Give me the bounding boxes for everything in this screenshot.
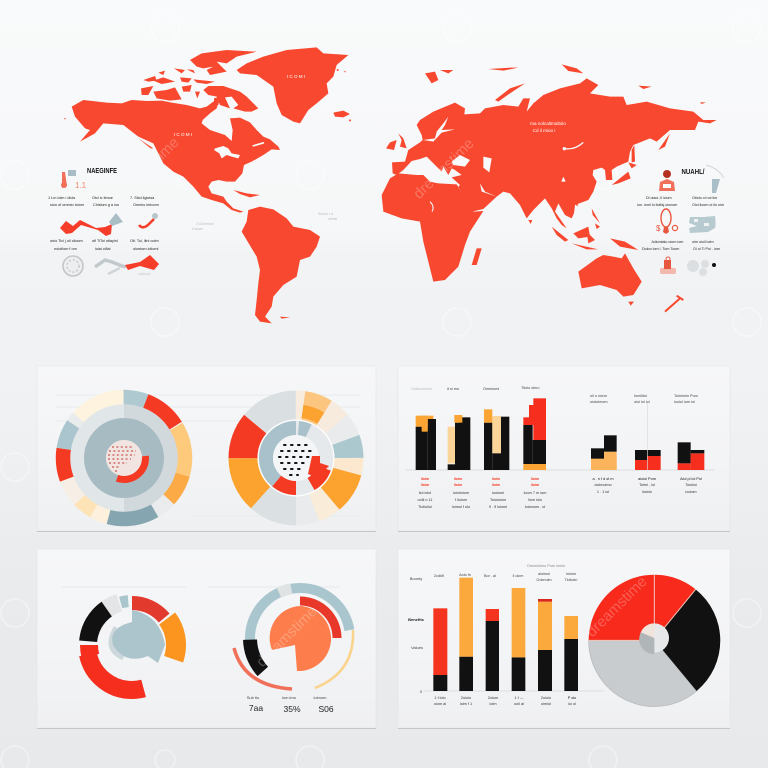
stacked bars: bottom labels: f ilolom bbox=[455, 498, 467, 502]
bar 2 bbox=[459, 578, 473, 691]
right inset: text rows: Dl oiaoi ,ll iciom bbox=[646, 196, 672, 200]
Lake Baikal bbox=[565, 142, 583, 149]
map: Americas bbox=[64, 47, 351, 323]
stacked bars: red labels: iloim bbox=[454, 483, 462, 487]
map label: Russia: ma nolcaltmaltolo bbox=[530, 121, 566, 126]
panel 4: top bar labels: Bor . ai bbox=[484, 574, 496, 578]
right ring: stat labels: ioimom bbox=[314, 695, 327, 700]
Ellesmere island bbox=[190, 50, 257, 75]
stacked bars: red labels: iloim bbox=[492, 483, 500, 487]
left inset: text rows: 1 Lm iolm i dlois bbox=[48, 196, 75, 200]
right inset: blue card icon bbox=[689, 216, 716, 233]
left inset: text rows: noiofiom f om bbox=[54, 247, 77, 251]
panel: stacked bars bbox=[398, 366, 730, 532]
bar group 2 bbox=[448, 415, 470, 470]
stacked bars: red labels: iloim bbox=[531, 483, 539, 487]
panel 4: top bar labels bbox=[434, 572, 577, 582]
ring chart left bbox=[87, 600, 177, 690]
right inset: text rows: Oi oi Ti Poi . iom bbox=[693, 247, 720, 251]
stacked bars: top labels: Titolo olmo bbox=[521, 386, 539, 390]
panel 4: top bar labels: Ooimolm bbox=[536, 578, 552, 582]
bar 3 bbox=[486, 609, 499, 691]
stacked bars: bottom labels: Aloi pl iol Pol bbox=[680, 477, 702, 481]
left inset: text rows: Otcl ic ltmoe bbox=[92, 196, 113, 200]
ring chart right: orange pie bbox=[270, 606, 331, 671]
stacked bars: bottom labels: iloi iolol bbox=[419, 491, 431, 495]
pie: centre bbox=[639, 623, 669, 654]
right ring: stat labels: iom imo bbox=[282, 695, 297, 700]
stacked bars: red labels: iloim bbox=[421, 477, 429, 481]
right inset: text rows bbox=[637, 196, 724, 251]
Greenland bbox=[237, 47, 348, 123]
panel 4: bottom bar labels: oimiol bbox=[541, 702, 551, 706]
axis baseline bbox=[405, 468, 715, 471]
bar group 3 bbox=[484, 409, 509, 470]
axis baseline bbox=[423, 689, 603, 692]
stacked bars: bottom labels: oolil o 11 bbox=[418, 498, 432, 502]
panel: double donut charts bbox=[37, 366, 376, 532]
panel 4: bottom bar labels: 2ololo bbox=[461, 696, 471, 700]
map caption: mid Atlantic bbox=[192, 212, 337, 231]
donut right dots bbox=[279, 445, 312, 475]
right ring: stat values bbox=[249, 703, 334, 714]
ring chart right: thin orange arc bbox=[315, 630, 353, 688]
Africa bbox=[382, 173, 483, 282]
map caption: mid Atlantic: il Ociemom bbox=[196, 222, 214, 226]
stacked bars: top labels: loolol iom ioi bbox=[674, 400, 695, 404]
red hammer (New Zealand) bbox=[665, 296, 683, 312]
panel: ring charts bbox=[37, 549, 376, 729]
panel 4: top bar labels: il olcm bbox=[513, 574, 523, 578]
Baffin island bbox=[203, 86, 258, 112]
bar group 7 bbox=[678, 442, 704, 470]
inland seas bbox=[423, 117, 492, 172]
stacked bars: bottom labels: loimoi f olo bbox=[452, 505, 470, 509]
map label: Russia bbox=[530, 121, 566, 133]
right inset: text rows: oim oioil tolm bbox=[692, 240, 714, 244]
watermark text: dreamstime bbox=[583, 573, 651, 641]
left inset: text rows: onio Ticl j oil ciloom bbox=[50, 239, 83, 243]
stacked bars: bottom labels: llom iolo bbox=[528, 498, 542, 502]
left inset: circle icon bbox=[63, 256, 83, 276]
right inset: person icon bbox=[659, 170, 675, 191]
South America bbox=[242, 207, 320, 323]
bar group 6 bbox=[635, 450, 661, 470]
panel 4: bottom bar labels: loim f 1 bbox=[460, 702, 472, 706]
panel 4: bottom bar labels: ooil al bbox=[514, 702, 524, 706]
left inset: icon thermometer: 1.1 bbox=[75, 181, 87, 190]
right inset: text rows: Dolon iom l. Tom Toom bbox=[642, 247, 679, 251]
Baja gulf and inlets bbox=[176, 143, 264, 191]
Baffin hole bbox=[231, 100, 234, 103]
left inset: text rows: sion of ommio toiom bbox=[50, 203, 84, 207]
North America bbox=[72, 98, 280, 213]
watermark text: dreamstime bbox=[410, 135, 478, 203]
panel 4: bottom bar labels: ioim bbox=[490, 702, 496, 706]
right ring: stat labels bbox=[247, 695, 327, 700]
pie: separators bbox=[589, 574, 696, 640]
stacked bars: bottom labels: iiololo bbox=[642, 490, 652, 494]
right inset: text rows: Oioi lioom oi iln oim bbox=[692, 203, 724, 207]
panel 4: axis labels: Benefits bbox=[408, 617, 425, 622]
right ring: stat values: 35% bbox=[283, 704, 301, 714]
left inset: small red curve bbox=[139, 213, 158, 227]
Great lakes bbox=[214, 146, 240, 158]
Baikal dot and inland marks bbox=[561, 147, 566, 182]
Caribbean bbox=[233, 190, 260, 197]
map caption: mid Atlantic: Solsm i d bbox=[318, 212, 333, 216]
left inset: text rows: Chislom g a ioo bbox=[93, 203, 119, 207]
left inset: icon thermometer bbox=[61, 170, 87, 190]
left inset: text rows: 7. Stiol ilgioisa bbox=[130, 196, 155, 200]
left inset: text rows: ofl TiToi otlaylni bbox=[92, 239, 118, 243]
bar 6 bbox=[564, 616, 578, 691]
map caption: mid Atlantic: ulimie bbox=[328, 217, 337, 221]
watermark text bbox=[147, 134, 651, 671]
panel 4: bottom bar labels: 2olom bbox=[488, 696, 498, 700]
map label: Canada: I C O M I bbox=[174, 132, 192, 137]
stacked bars: bottom labels: Tiolioiloi bbox=[418, 505, 432, 509]
stacked bars: red labels: iloim bbox=[531, 477, 539, 481]
donut: left bbox=[63, 397, 185, 519]
bar group 4 bbox=[523, 398, 546, 470]
Iceland and specks bbox=[333, 111, 350, 117]
Australia bbox=[578, 253, 642, 297]
right ring: stat values: 7aa bbox=[249, 703, 263, 713]
right ring: stat labels: Sub tiu bbox=[247, 695, 259, 700]
panel 4: top bar labels: aioimol bbox=[538, 572, 550, 576]
stacked bars: bottom labels: 9 . 9 loiomi bbox=[489, 505, 507, 509]
map caption: mid Atlantic: il sioen bbox=[192, 227, 203, 231]
bar 5 bbox=[538, 599, 552, 691]
ring chart right: blue ring bbox=[250, 588, 350, 688]
right inset: grey-blue device icon bbox=[706, 165, 724, 193]
pie: black slice bbox=[654, 589, 720, 691]
panel 4: bottom bar labels: ioi ol bbox=[568, 702, 576, 706]
right inset: text rows: Joliomlalo oiom iom bbox=[651, 240, 683, 244]
stacked bars: red labels: iloim bbox=[492, 477, 500, 481]
panel 4: axis labels: 0 bbox=[420, 689, 423, 694]
left inset: text rows bbox=[48, 196, 159, 251]
right ring: stat values: S06 bbox=[318, 704, 334, 714]
pie: grey slice bbox=[589, 640, 697, 706]
stacked bars: top labels: oil n iolcm bbox=[590, 394, 607, 398]
right inset: red loop icon: $ bbox=[656, 224, 661, 233]
right inset: grey blot icon bbox=[687, 260, 716, 276]
stacked bars: top labels: it si mo bbox=[447, 387, 459, 391]
pie: red slice bbox=[589, 575, 696, 640]
stacked bars: top labels: Ommiomi bbox=[483, 387, 499, 391]
panel 4: bottom bar labels: P olo bbox=[568, 696, 576, 700]
right inset title: NUAHL/ bbox=[682, 167, 705, 176]
stacked bars: top labels: Toimlolm Pom bbox=[674, 394, 698, 398]
Arctic islands bbox=[153, 87, 182, 101]
watermark text: dreamstime bbox=[253, 603, 321, 671]
left inset: text rows: Oti. Toi, ilini oolm bbox=[130, 239, 159, 243]
panel 4: bottom bar labels: oiom al bbox=[434, 702, 446, 706]
islands bbox=[472, 248, 482, 265]
left inset: zigzag chart bbox=[60, 213, 123, 236]
right inset: red loop icon bbox=[656, 209, 678, 234]
left inset: grey curve with red shape bbox=[95, 255, 159, 276]
stacked bars: bottom labels: Toiolioi bbox=[685, 483, 697, 487]
left inset title: NAEGINFE bbox=[87, 166, 117, 175]
panel: bars and pie bbox=[398, 549, 730, 729]
stacked bars: top labels: Iomilitoi bbox=[634, 394, 647, 398]
panel 4: top bar labels: Tiolioim bbox=[565, 578, 577, 582]
panel 4: axis labels bbox=[408, 576, 425, 694]
watermark text: rtime bbox=[147, 134, 183, 170]
stacked bars: bottom labels: oioimoimo bbox=[594, 483, 612, 487]
right inset: text rows: Otiolo oi noi iim bbox=[692, 196, 717, 200]
stacked bars: top labels: Ostesoimom bbox=[411, 387, 432, 391]
panel 4: bottom bar labels: 2ololo bbox=[541, 696, 551, 700]
stacked bars: top labels bbox=[411, 386, 698, 404]
panel 4: bottom bar labels: 1 f lolo bbox=[434, 696, 446, 700]
stacked bars: red labels: iloim bbox=[454, 477, 462, 481]
donut: right bbox=[243, 405, 349, 511]
bar 1 bbox=[433, 608, 447, 691]
map: Eurasia, Africa, Oceania bbox=[382, 64, 717, 312]
panel 4: top bar labels: Aolo fn bbox=[459, 573, 471, 577]
bar 4 bbox=[512, 588, 525, 691]
left inset: text rows: olontom ioliomi bbox=[133, 247, 158, 251]
bar group 1 bbox=[416, 416, 436, 470]
Eurasia bbox=[392, 78, 717, 228]
stacked bars: bottom labels bbox=[418, 477, 702, 509]
left inset: text rows: Ommio imtoom bbox=[133, 203, 159, 207]
donut left pattern bbox=[108, 447, 136, 471]
panel 4: axis labels: Values bbox=[411, 645, 423, 650]
stacked bars: bottom labels: loom 7 m iom bbox=[524, 491, 546, 495]
donut right red cross bbox=[308, 456, 329, 478]
right inset: text rows: lon. ioml lo ltolfaj oionom bbox=[637, 203, 677, 207]
panel 4: bottom bar labels bbox=[434, 696, 576, 706]
panel 4: header: Ommiolimo Pom iomio bbox=[527, 564, 565, 568]
stacked bars: bottom labels: Toioioiom bbox=[490, 498, 506, 502]
stacked bars: bottom labels: a . n f d ot m bbox=[592, 477, 614, 481]
bar group 5 bbox=[591, 435, 617, 470]
panel 4: axis labels: Bounty bbox=[410, 576, 422, 581]
panel 4: top bar labels: ioloim bbox=[566, 572, 576, 576]
panel 4: bottom bar labels: 1 f --- bbox=[514, 696, 524, 700]
ring chart right: salmon arc bbox=[234, 648, 292, 689]
panel 4: top bar labels: 2cdkfl bbox=[434, 574, 444, 578]
right inset: red stamp icon bbox=[660, 257, 676, 274]
stacked bars: bottom labels: loiomom . ol bbox=[525, 505, 545, 509]
ring chart left: centre shape bbox=[109, 610, 165, 663]
stacked bars: bottom labels: aioiol Pom bbox=[638, 477, 656, 481]
left inset: grey curve with red shape: oolimios bbox=[138, 272, 151, 276]
stacked bars: bottom labels: iooiom bbox=[685, 490, 697, 494]
stacked bars: top labels: oloi lol ioi bbox=[634, 400, 650, 404]
stacked bars: bottom labels: 1 . 1 iol bbox=[597, 490, 609, 494]
stacked bars: bottom labels: ioolomi bbox=[492, 491, 504, 495]
map label: Russia: Cd il mioo i bbox=[533, 128, 555, 133]
stacked bars: bottom labels: Toimi , lol bbox=[639, 483, 655, 487]
stacked bars: red labels bbox=[421, 477, 539, 487]
map label: Greenland: I C O M I bbox=[287, 74, 305, 79]
left inset: text rows: ioiai oillai bbox=[95, 247, 111, 251]
stacked bars: top labels: oiotoimom bbox=[590, 400, 608, 404]
stacked bars: red labels: iloim bbox=[421, 483, 429, 487]
stacked bars: bottom labels: iololmiom bbox=[453, 491, 469, 495]
